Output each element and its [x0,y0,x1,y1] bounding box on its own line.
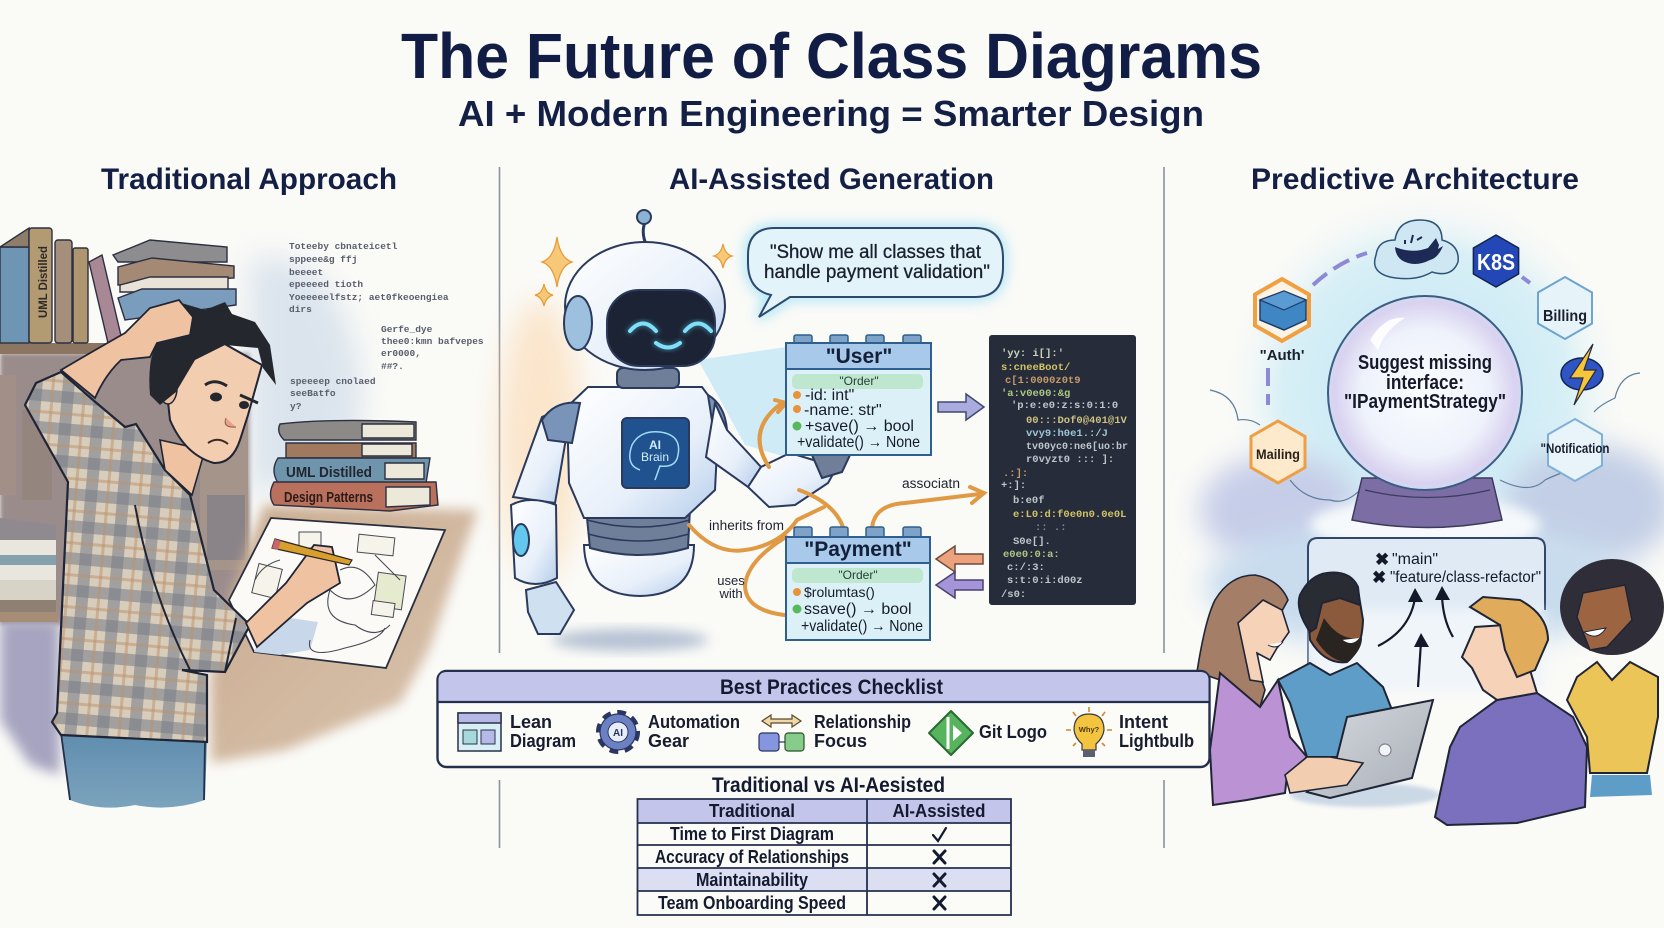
text: book spine: UML Distilled [36,246,50,318]
panel: generated code: e:L0:d:f0e0n0.0e0L [1013,509,1126,521]
checklist item: git logo: Git Logo [979,722,1047,742]
drawing forearm and hand [246,545,340,647]
illustration: robot shadow [552,629,708,651]
panel: generated code: 'p:e:e0:z:s:0:1:0 [1011,400,1118,412]
text: crystal ball suggestion: "IPaymentStrategy" [1344,391,1506,413]
panel: generated code: e0e0:0:a: [1003,549,1060,561]
panel: best practices checklist [438,671,1210,767]
text: floating code notes: thee0:kmn bafvepes [381,336,484,347]
table: traditional vs AI-assisted: Accuracy of Relationships [655,847,849,867]
robot lower body [584,545,694,596]
checklist item: intent lightbulb: Intent [1119,712,1168,732]
text: branch names: ✖ [1372,568,1386,587]
callout: speech bubble [748,228,1003,317]
icon: dashed connectors [1268,253,1530,405]
face [165,330,262,463]
text: floating code notes: y? [290,401,302,412]
checklist item: automation gear: Gear [648,731,689,751]
pencil [272,539,352,565]
text: floating code notes: sppeee&g ffj [289,254,357,265]
illustration: top book stack [113,240,236,320]
checklist item: intent lightbulb: Lightbulb [1119,731,1194,751]
woman's arm and hand [1285,757,1363,793]
arrows: merging upward [1378,596,1453,687]
callout: speech bubble: handle payment validation" [764,262,990,283]
panel: generated code: 00:::Dof0@401@1V [1026,415,1128,427]
illustration: crystal ball [1328,296,1522,490]
callout: speech bubble: "Show me all classes that [770,242,982,263]
icon: sparkles [535,237,732,306]
icon: Mailing service [1251,421,1305,483]
robot shoulders [542,403,580,443]
text: floating code notes: dirs [289,304,312,315]
panel: generated code: /s0: [1001,589,1026,601]
class box: Payment: "Payment" [804,538,912,561]
panel: generated code: c:/:3: [1007,562,1045,574]
robot head [565,242,725,370]
panel: generated code: vvy9:h0e1.:/J [1026,428,1108,440]
panel: generated code: S0e[]. [1013,536,1051,548]
label: inherits from: inherits from [709,518,784,533]
icon: Auth service [1255,279,1309,341]
panel: predictive architecture [1197,163,1664,825]
text: floating code notes: ##?. [381,361,404,372]
icon: Notification service [1540,419,1610,481]
text: crystal ball suggestion: interface: [1386,372,1464,394]
neck [160,440,205,495]
text: branch names [1372,550,1541,587]
checklist item: automation gear: AI [613,728,623,739]
checklist item: relationship focus: Relationship [814,712,911,732]
person: woman in purple [1197,575,1307,805]
panel: generated code: tv00yc0:ne6[uo:br [1026,441,1128,453]
heading: traditional approach: Traditional Approach [101,163,397,196]
panel: AI-assisted generation [498,163,1136,651]
text: crystal ball suggestion [1344,352,1506,413]
icon: Notification service: "Notification [1540,440,1610,456]
checklist item: intent lightbulb [1066,707,1194,757]
illustration: clouds and washes [1200,188,1664,650]
text: floating code notes: Toteeby cbnateicetl [289,241,398,252]
text: floating code notes: epeeeed tioth [289,279,363,290]
checklist item: lean diagram: Diagram [510,731,576,751]
panel: generated code [989,335,1136,605]
panel: generated code: r0vyzt0 ::: ]: [1026,454,1114,466]
class box: Payment: "Order" [838,568,878,582]
checklist item: relationship focus [759,712,911,751]
icon: Billing service: Billing [1543,308,1587,325]
person: man in blue [1278,573,1392,757]
arrow: class to code [938,394,984,420]
class box: User [786,335,931,455]
class box: User: "Order" [839,374,879,388]
plaid shirt [25,372,250,742]
illustration: warm wash behind robot [498,300,582,580]
arrow: code to payment purple [936,572,983,598]
label: uses with: uses [717,573,745,588]
table: traditional vs AI-assisted: Team Onboarding Speed [658,893,846,913]
label: Auth: "Auth' [1260,347,1304,364]
class box: Payment: ssave() → bool [804,601,912,618]
icon: Billing service [1538,277,1592,339]
robot left arm [513,403,572,503]
text: floating code notes: beeeet [289,267,323,278]
checklist item: intent lightbulb: Why? [1079,725,1100,734]
checklist item: lean diagram [458,712,576,751]
class box: User: -id: int" [805,387,854,404]
panel: generated code: 'yy: i[]:' [1001,348,1064,360]
table: traditional vs AI-assisted: Maintainability [696,870,808,890]
robot face [630,324,711,348]
title: The Future of Class Diagrams [401,20,1262,92]
divider: left [498,167,500,848]
jeans [60,730,207,808]
text: branch names: ✖ [1375,550,1389,569]
checklist item: automation gear: Automation [648,712,740,732]
class box: User: "User" [826,345,892,368]
robot chest screen: Brain [641,450,669,464]
illustration: drawing paper [229,518,445,668]
illustration: bookshelf background [0,258,361,775]
arrow: code to payment orange [936,546,983,572]
text: branch names: "feature/class-refactor" [1390,569,1541,586]
icon: Mailing service: Mailing [1256,446,1300,462]
panel: generated code: s:cneeBoot/ [1001,362,1070,374]
checklist item: lean diagram: Lean [510,712,552,732]
text: branch names: "main" [1392,551,1438,568]
icon: docker cloud [1375,220,1458,279]
label: uses with: with [718,586,743,601]
heading: AI-assisted generation: AI-Assisted Generation [669,163,994,196]
text: book title: UML Distilled [286,464,372,481]
class box: User: +validate() → None [797,434,920,451]
icon: K8S badge [1473,235,1519,287]
text: floating code notes: Yoeeeeelfstz; aet0fkeoengiea [289,292,449,303]
laptop shadow [1290,783,1440,807]
text: floating code notes: Gerfe_dye [381,324,433,335]
robot face glow [630,324,711,348]
eyes and mouth [205,382,258,403]
text: floating code notes [289,241,484,412]
heading: predictive architecture: Predictive Architecture [1251,163,1579,196]
class box: Payment: +validate() → None [801,618,923,635]
label: association: associatn [902,476,960,491]
panel: generated code: 'a:v0e00:&g [1001,388,1070,400]
panel: generated code: b:e0f [1013,495,1045,507]
text: floating code notes: seeBatfo [290,388,336,399]
robot antenna [643,222,649,250]
heading: comparison table title: Traditional vs AI-Aesisted [712,774,945,797]
text: crystal ball suggestion: Suggest missing [1358,352,1492,374]
illustration: desk books [270,420,438,511]
arrow: orange inherits [689,400,984,615]
laptop logo [1379,744,1391,756]
table: traditional vs AI-assisted: Traditional [709,801,795,821]
class box: Payment: $rolumtas() [804,584,875,600]
text: floating code notes: er0000, [381,348,421,359]
panel: generated code: .:]: [1003,468,1028,480]
hair [149,302,276,405]
checklist item: relationship focus: Focus [814,731,867,751]
robot chest screen: AI [649,438,661,452]
raised forearm and hand [61,300,193,398]
panel: git branches [1308,538,1545,690]
icon: K8S badge: K8S [1477,249,1515,275]
table: traditional vs AI-assisted: AI-Assisted [892,801,986,821]
table: traditional vs AI-assisted: Time to First Diagram [670,824,834,844]
panel: generated code: s:t:0:i:d00z [1007,575,1083,587]
laptop [1307,700,1433,798]
panel: generated code: +:]: [1001,480,1026,492]
robot right arm [706,403,761,487]
class box: User: -name: str" [804,402,882,419]
class box: User: +save() → bool [805,418,914,435]
checklist item: automation gear [600,712,740,751]
robot chest screen [622,418,689,488]
illustration: team of developers [1197,559,1664,825]
robot neck [617,368,679,388]
icon: lightning event bus [1561,344,1603,405]
label: uses with [717,573,745,601]
divider: right [1163,167,1165,848]
illustration: frustrated developer [25,300,352,808]
illustration: desk wash [210,505,478,763]
person: blond man in purple [1435,597,1587,825]
panel: generated code: c[1:0000z0t9 [1005,375,1081,387]
panel: traditional approach [0,163,484,808]
text: floating code notes: speeeep cnolaed [290,376,376,387]
class box: Payment [786,527,930,640]
illustration: crystal ball stand [1352,478,1502,528]
checklist item: git logo [929,711,1047,755]
table: traditional vs AI-assisted [638,799,1011,915]
illustration: scan beam [698,347,786,457]
table marks: check and crosses [933,828,946,909]
person: woman in yellow [1560,559,1664,797]
illustration: shelf books [0,228,122,343]
text: book title: Design Patterns [284,489,373,506]
illustration: robot [511,210,850,634]
robot torso [567,387,719,518]
subtitle: AI + Modern Engineering = Smarter Design [458,93,1204,134]
heading: best practices: Best Practices Checklist [720,676,943,699]
panel: generated code: :: .: [1035,522,1067,534]
